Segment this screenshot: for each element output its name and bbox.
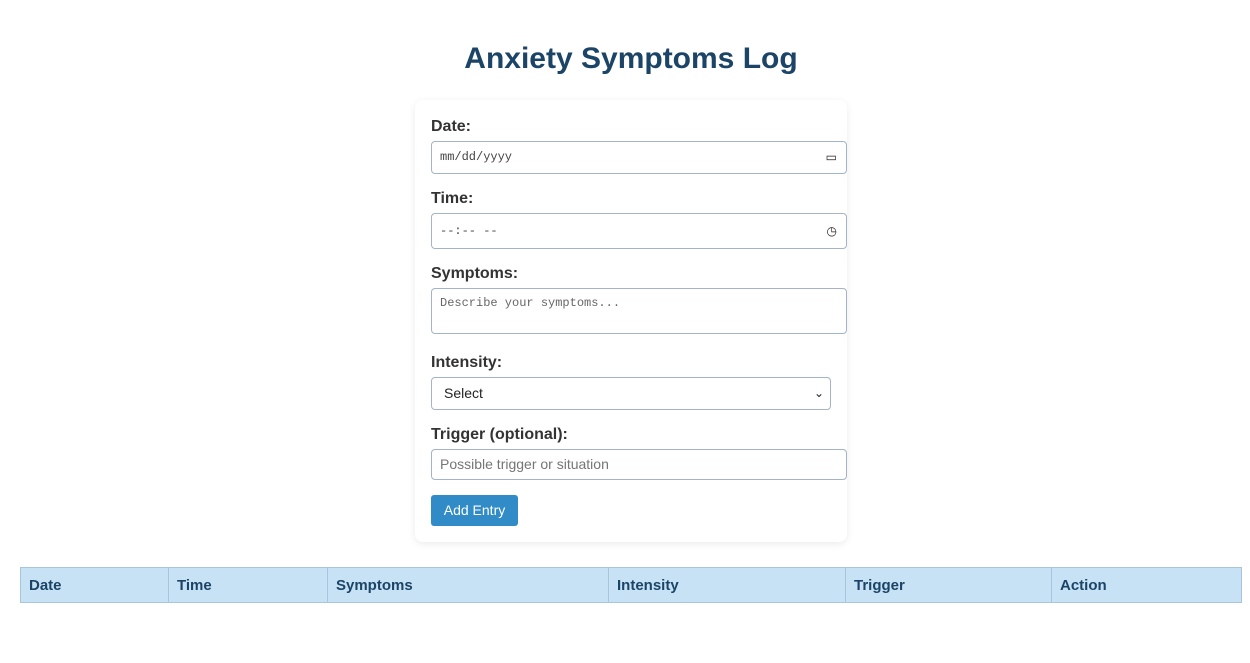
select: intensity: Select bbox=[444, 385, 483, 401]
label: date: Date: bbox=[431, 118, 471, 135]
label: symptoms: Symptoms: bbox=[431, 265, 518, 282]
label: trigger: Trigger (optional): bbox=[431, 426, 568, 443]
table header bbox=[20, 567, 1242, 603]
label: intensity: Intensity: bbox=[431, 354, 502, 371]
textarea: symptoms: Describe your symptoms... bbox=[440, 296, 620, 310]
input: time: ◷ bbox=[827, 224, 837, 238]
label: time: Time: bbox=[431, 190, 473, 207]
input: time: --:-- -- bbox=[440, 224, 498, 238]
table header: Intensity bbox=[617, 577, 679, 594]
panel: entry form bbox=[415, 100, 847, 542]
select: intensity bbox=[431, 377, 831, 410]
input: date bbox=[431, 141, 847, 174]
button: add entry bbox=[431, 495, 518, 526]
textarea: symptoms bbox=[431, 288, 847, 334]
input: date: ▭ bbox=[826, 150, 837, 164]
table header: Date bbox=[29, 577, 62, 594]
table header: Time bbox=[177, 577, 212, 594]
button: add entry: Add Entry bbox=[444, 502, 505, 518]
input: trigger bbox=[431, 449, 847, 480]
table header: Trigger bbox=[854, 577, 905, 594]
input: date: mm/dd/yyyy bbox=[440, 150, 512, 164]
table header: Symptoms bbox=[336, 577, 413, 594]
select: intensity: ⌄ bbox=[814, 386, 824, 400]
title: Anxiety Symptoms Log bbox=[464, 42, 798, 75]
input: time bbox=[431, 213, 847, 249]
input: trigger: Possible trigger or situation bbox=[440, 456, 609, 472]
table header: Action bbox=[1060, 577, 1107, 594]
